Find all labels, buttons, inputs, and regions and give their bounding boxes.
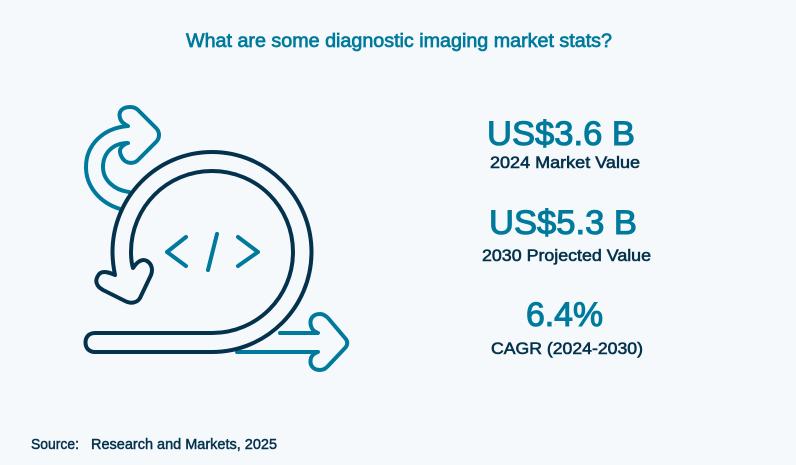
icon: agile iteration loop with code symbol <box>86 107 347 370</box>
stat: 2024 market value: 2024 Market Value <box>490 153 640 172</box>
stat: 2024 market value <box>487 115 640 172</box>
stat: 2030 projected value <box>482 204 651 265</box>
stat: CAGR <box>491 296 643 358</box>
stat: 2030 projected value: US$5.3 B <box>489 204 637 242</box>
stat: CAGR: CAGR (2024-2030) <box>491 339 643 358</box>
icon: teal straight arrow bottom right <box>237 314 347 370</box>
icon: code brackets and slash <box>167 234 258 270</box>
stat: 2024 market value: US$3.6 B <box>487 115 635 153</box>
source note: Research and Markets, 2025 <box>91 436 277 453</box>
icon: teal curved arrow top left <box>86 107 159 209</box>
stat: CAGR: 6.4% <box>526 296 603 334</box>
icon: dark spiral arrow <box>86 152 312 352</box>
source note: Source: <box>31 436 79 453</box>
title: What are some diagnostic imaging market stats? <box>186 31 612 52</box>
stat: 2030 projected value: 2030 Projected Value <box>482 246 651 265</box>
